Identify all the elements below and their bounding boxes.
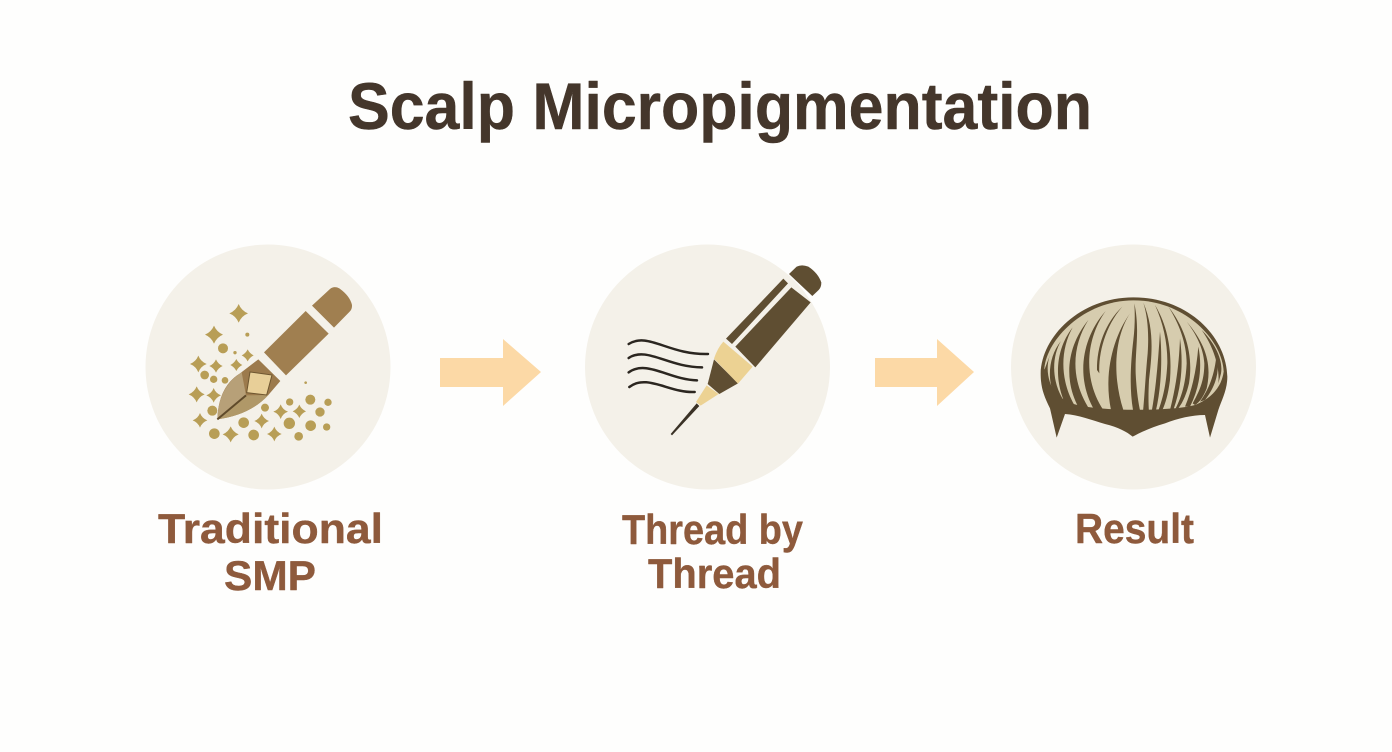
icon: full head of hair [1041,297,1227,438]
icon: fine-tip pen with hair strokes [629,265,821,435]
panel: result [1011,244,1256,552]
pen band and collar [696,342,753,406]
title: Scalp Micropigmentation [348,69,1092,143]
label: Thread by Thread: Thread by [622,506,804,553]
hair base [1041,297,1227,438]
arrow: traditional to thread [440,339,541,406]
hair light dome [1044,300,1224,410]
label: Traditional SMP [158,505,383,599]
label: Thread by Thread [622,506,804,597]
pen body [264,311,329,375]
panel: thread by thread [585,244,830,597]
pen barrel [708,265,821,394]
hair dark gaps [1044,303,1221,412]
pigment particles [189,304,332,442]
icon circle: result [1011,244,1256,490]
hair stroke lines [629,340,708,392]
label: Traditional SMP: SMP [224,552,316,599]
pen cap [312,287,352,328]
label: Thread by Thread: Thread [648,550,781,597]
arrow: thread to result [875,339,974,406]
icon: SMP pen with pigment dots [189,287,352,442]
icon circle: thread by thread [585,244,830,490]
label: Result: Result [1075,505,1194,552]
pen nib [217,359,280,419]
panel: traditional SMP [146,244,390,599]
label: Traditional SMP: Traditional [158,505,383,552]
pen needle [671,403,699,435]
icon circle: traditional SMP [146,244,390,490]
